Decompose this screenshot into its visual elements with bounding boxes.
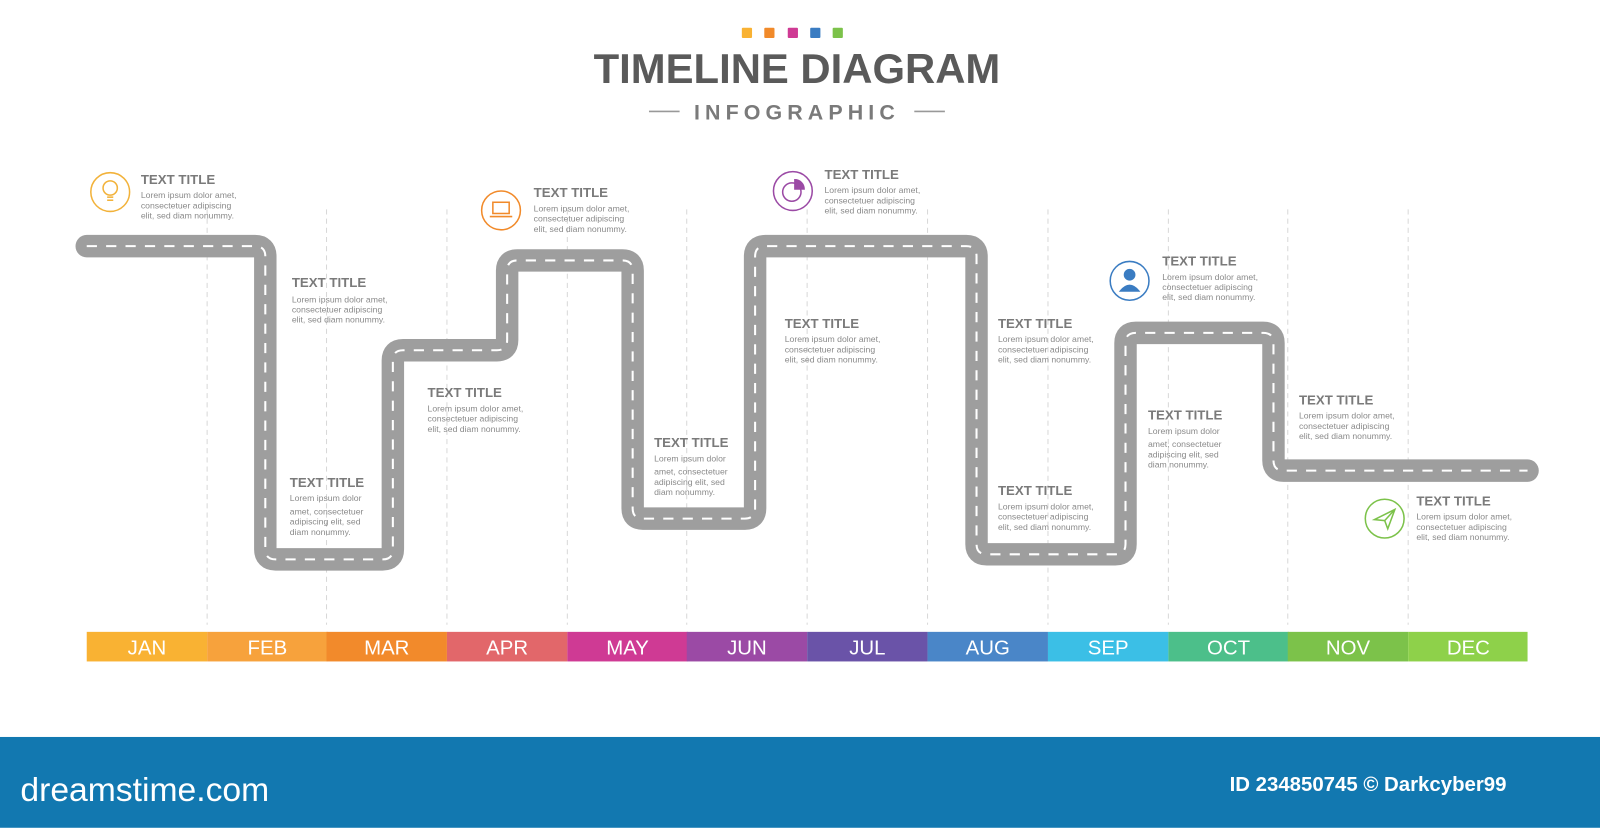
text block 8 xyxy=(785,316,880,364)
month bar: JUN xyxy=(727,637,767,659)
month bar: NOV xyxy=(1326,637,1370,659)
text block 4: elit, sed diam nonummy. xyxy=(534,224,627,234)
icon: laptop xyxy=(482,191,520,230)
footer band: dreamstime.com xyxy=(20,772,269,809)
text block 10: Lorem ipsum dolor amet, xyxy=(998,501,1094,511)
month bar: DEC xyxy=(1447,637,1490,659)
text block 3: adipiscing elit, sed xyxy=(290,517,361,527)
text block 2 xyxy=(292,275,388,325)
text block 12: amet, consectetuer xyxy=(1148,439,1222,449)
text block 2: elit, sed diam nonummy. xyxy=(292,315,385,325)
text block 6: adipiscing elit, sed xyxy=(654,477,725,487)
text block 10: TEXT TITLE xyxy=(998,483,1072,498)
text block 14: Lorem ipsum dolor amet, xyxy=(1416,512,1512,522)
text block 1: TEXT TITLE xyxy=(141,172,215,187)
text block 1: consectetuer adipiscing xyxy=(141,200,231,210)
text block 12 xyxy=(1148,408,1222,470)
text block 7: Lorem ipsum dolor amet, xyxy=(824,185,920,195)
month bar: OCT xyxy=(1207,637,1250,659)
icon: pie chart xyxy=(773,172,812,210)
month bar: JAN xyxy=(128,637,166,659)
text block 10: elit, sed diam nonummy. xyxy=(998,522,1091,532)
text block 8: consectetuer adipiscing xyxy=(785,344,875,354)
text block 5: Lorem ipsum dolor amet, xyxy=(428,403,523,413)
text block 7: TEXT TITLE xyxy=(824,167,899,182)
text block 3: amet, consectetuer xyxy=(290,507,364,517)
text block 11: elit, sed diam nonummy. xyxy=(1162,292,1255,302)
text block 13: elit, sed diam nonummy. xyxy=(1299,431,1392,441)
text block 5: TEXT TITLE xyxy=(428,385,502,400)
month bar: MAY xyxy=(606,637,649,659)
text block 13: Lorem ipsum dolor amet, xyxy=(1299,411,1395,421)
text block 9: TEXT TITLE xyxy=(998,316,1072,331)
text block 9: elit, sed diam nonummy. xyxy=(998,354,1091,364)
month bar: SEP xyxy=(1088,637,1129,659)
icon: paper plane xyxy=(1365,499,1404,538)
text block 7: consectetuer adipiscing xyxy=(824,195,915,205)
text block 6: amet, consectetuer xyxy=(654,467,728,477)
text block 11: TEXT TITLE xyxy=(1162,254,1237,269)
text block 3: diam nonummy. xyxy=(290,527,351,537)
footer band xyxy=(0,737,1600,828)
text block 2: Lorem ipsum dolor amet, xyxy=(292,294,388,304)
text block 9 xyxy=(998,316,1094,364)
text block 13: consectetuer adipiscing xyxy=(1299,421,1390,431)
text block 12: diam nonummy. xyxy=(1148,460,1209,470)
text block 3: Lorem ipsum dolor xyxy=(290,493,362,503)
text block 3 xyxy=(290,475,364,537)
header squares xyxy=(742,28,843,38)
text block 14: consectetuer adipiscing xyxy=(1416,522,1507,532)
text block 3: TEXT TITLE xyxy=(290,475,364,490)
text block 7 xyxy=(824,167,920,215)
text block 11: Lorem ipsum dolor amet, xyxy=(1162,272,1258,282)
text block 4: TEXT TITLE xyxy=(534,185,608,200)
text block 6: Lorem ipsum dolor xyxy=(654,453,726,463)
text block 8: Lorem ipsum dolor amet, xyxy=(785,334,880,344)
text block 14: TEXT TITLE xyxy=(1416,493,1491,508)
month bar: AUG xyxy=(966,637,1010,659)
text block 6 xyxy=(654,435,729,497)
icon: bulb xyxy=(91,173,130,211)
text block 9: Lorem ipsum dolor amet, xyxy=(998,334,1094,344)
month bar: JUL xyxy=(849,637,885,659)
month bar: APR xyxy=(486,637,528,659)
text block 13: TEXT TITLE xyxy=(1299,392,1373,407)
text block 14 xyxy=(1416,493,1512,542)
month bar: FEB xyxy=(248,637,287,659)
text block 4: Lorem ipsum dolor amet, xyxy=(534,203,629,213)
title: TIMELINE DIAGRAM xyxy=(594,45,1000,92)
text block 5: elit, sed diam nonummy. xyxy=(428,424,521,434)
text block 1: elit, sed diam nonummy. xyxy=(141,211,234,221)
text block 4: consectetuer adipiscing xyxy=(534,214,624,224)
text block 6: TEXT TITLE xyxy=(654,435,729,450)
text block 2: TEXT TITLE xyxy=(292,275,366,290)
text block 13 xyxy=(1299,392,1395,441)
footer band: ID 234850745 © Darkcyber99 xyxy=(1230,774,1507,796)
text block 5 xyxy=(428,385,523,434)
text block 12: Lorem ipsum dolor xyxy=(1148,426,1220,436)
text block 10: consectetuer adipiscing xyxy=(998,512,1089,522)
text block 14: elit, sed diam nonummy. xyxy=(1416,532,1510,542)
text block 12: adipiscing elit, sed xyxy=(1148,449,1219,459)
road path xyxy=(87,246,1528,559)
text block 7: elit, sed diam nonummy. xyxy=(824,205,918,215)
text block 6: diam nonummy. xyxy=(654,487,715,497)
month bar: MAR xyxy=(364,637,409,659)
text block 2: consectetuer adipiscing xyxy=(292,304,382,314)
month bar xyxy=(87,632,1528,661)
text block 5: consectetuer adipiscing xyxy=(428,414,518,424)
text block 11 xyxy=(1162,254,1258,302)
text block 8: TEXT TITLE xyxy=(785,316,859,331)
text block 1: Lorem ipsum dolor amet, xyxy=(141,190,237,200)
text block 11: consectetuer adipiscing xyxy=(1162,282,1253,292)
text block 12: TEXT TITLE xyxy=(1148,408,1222,423)
icon: person xyxy=(1110,261,1149,300)
text block 10 xyxy=(998,483,1094,532)
text block 4 xyxy=(534,185,629,234)
text block 1 xyxy=(141,172,237,221)
text block 9: consectetuer adipiscing xyxy=(998,344,1089,354)
text block 8: elit, sed diam nonummy. xyxy=(785,354,878,364)
subtitle: INFOGRAPHIC xyxy=(694,101,900,125)
